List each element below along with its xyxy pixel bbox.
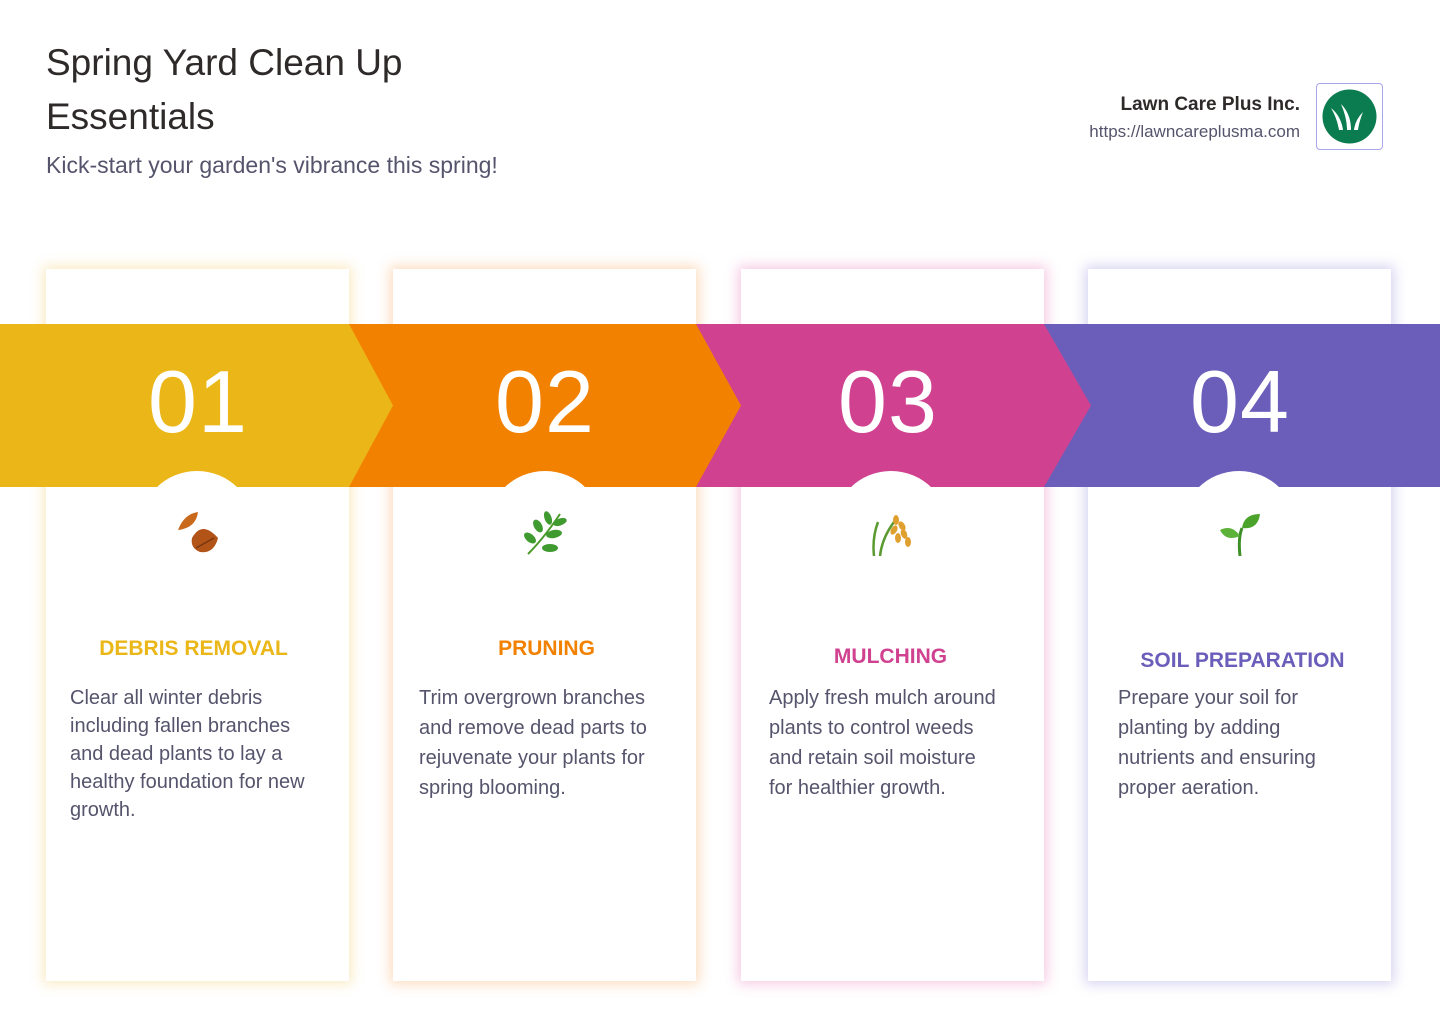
brand: https://lawncareplusma.com bbox=[1089, 122, 1300, 141]
subtitle: Kick-start your garden's vibrance this spring! bbox=[46, 152, 498, 178]
banner arrows bbox=[0, 324, 1440, 487]
white cap 1 bbox=[139, 471, 255, 587]
white cap 4 bbox=[1181, 471, 1297, 587]
number 04: 04 bbox=[1190, 352, 1290, 451]
heading 4: SOIL PREPARATION bbox=[1140, 649, 1345, 672]
icon: herb branch bbox=[524, 511, 567, 555]
card 3 bbox=[741, 269, 1044, 981]
number 01: 01 bbox=[148, 352, 248, 451]
logo bbox=[1316, 83, 1383, 150]
title: Essentials bbox=[46, 96, 215, 137]
icon: fallen leaves bbox=[178, 512, 218, 552]
card 2 bbox=[393, 269, 696, 981]
title bbox=[46, 42, 403, 137]
number 02: 02 bbox=[495, 352, 595, 451]
text 2: Trim overgrown branches and remove dead parts to rejuvenate your plants for spring blooming. bbox=[419, 687, 647, 799]
white cap 2 bbox=[487, 471, 603, 587]
card 1 bbox=[46, 269, 349, 981]
number 03: 03 bbox=[838, 352, 938, 451]
brand: Lawn Care Plus Inc. bbox=[1120, 94, 1300, 115]
white cap 3 bbox=[833, 471, 949, 587]
text 1: Clear all winter debris including fallen branches and dead plants to lay a healthy foundation for new growth. bbox=[70, 687, 305, 821]
title: Spring Yard Clean Up bbox=[46, 42, 403, 83]
heading 1: DEBRIS REMOVAL bbox=[99, 637, 288, 660]
text 4: Prepare your soil for planting by adding nutrients and ensuring proper aeration. bbox=[1118, 687, 1316, 799]
card 4 bbox=[1088, 269, 1391, 981]
heading 3: MULCHING bbox=[834, 645, 947, 668]
brand bbox=[1089, 94, 1300, 141]
icon: grain bbox=[872, 515, 911, 556]
heading 2: PRUNING bbox=[498, 637, 595, 660]
icon: sprout bbox=[1220, 514, 1260, 556]
text 3: Apply fresh mulch around plants to control weeds and retain soil moisture for healthier growth. bbox=[769, 687, 996, 799]
